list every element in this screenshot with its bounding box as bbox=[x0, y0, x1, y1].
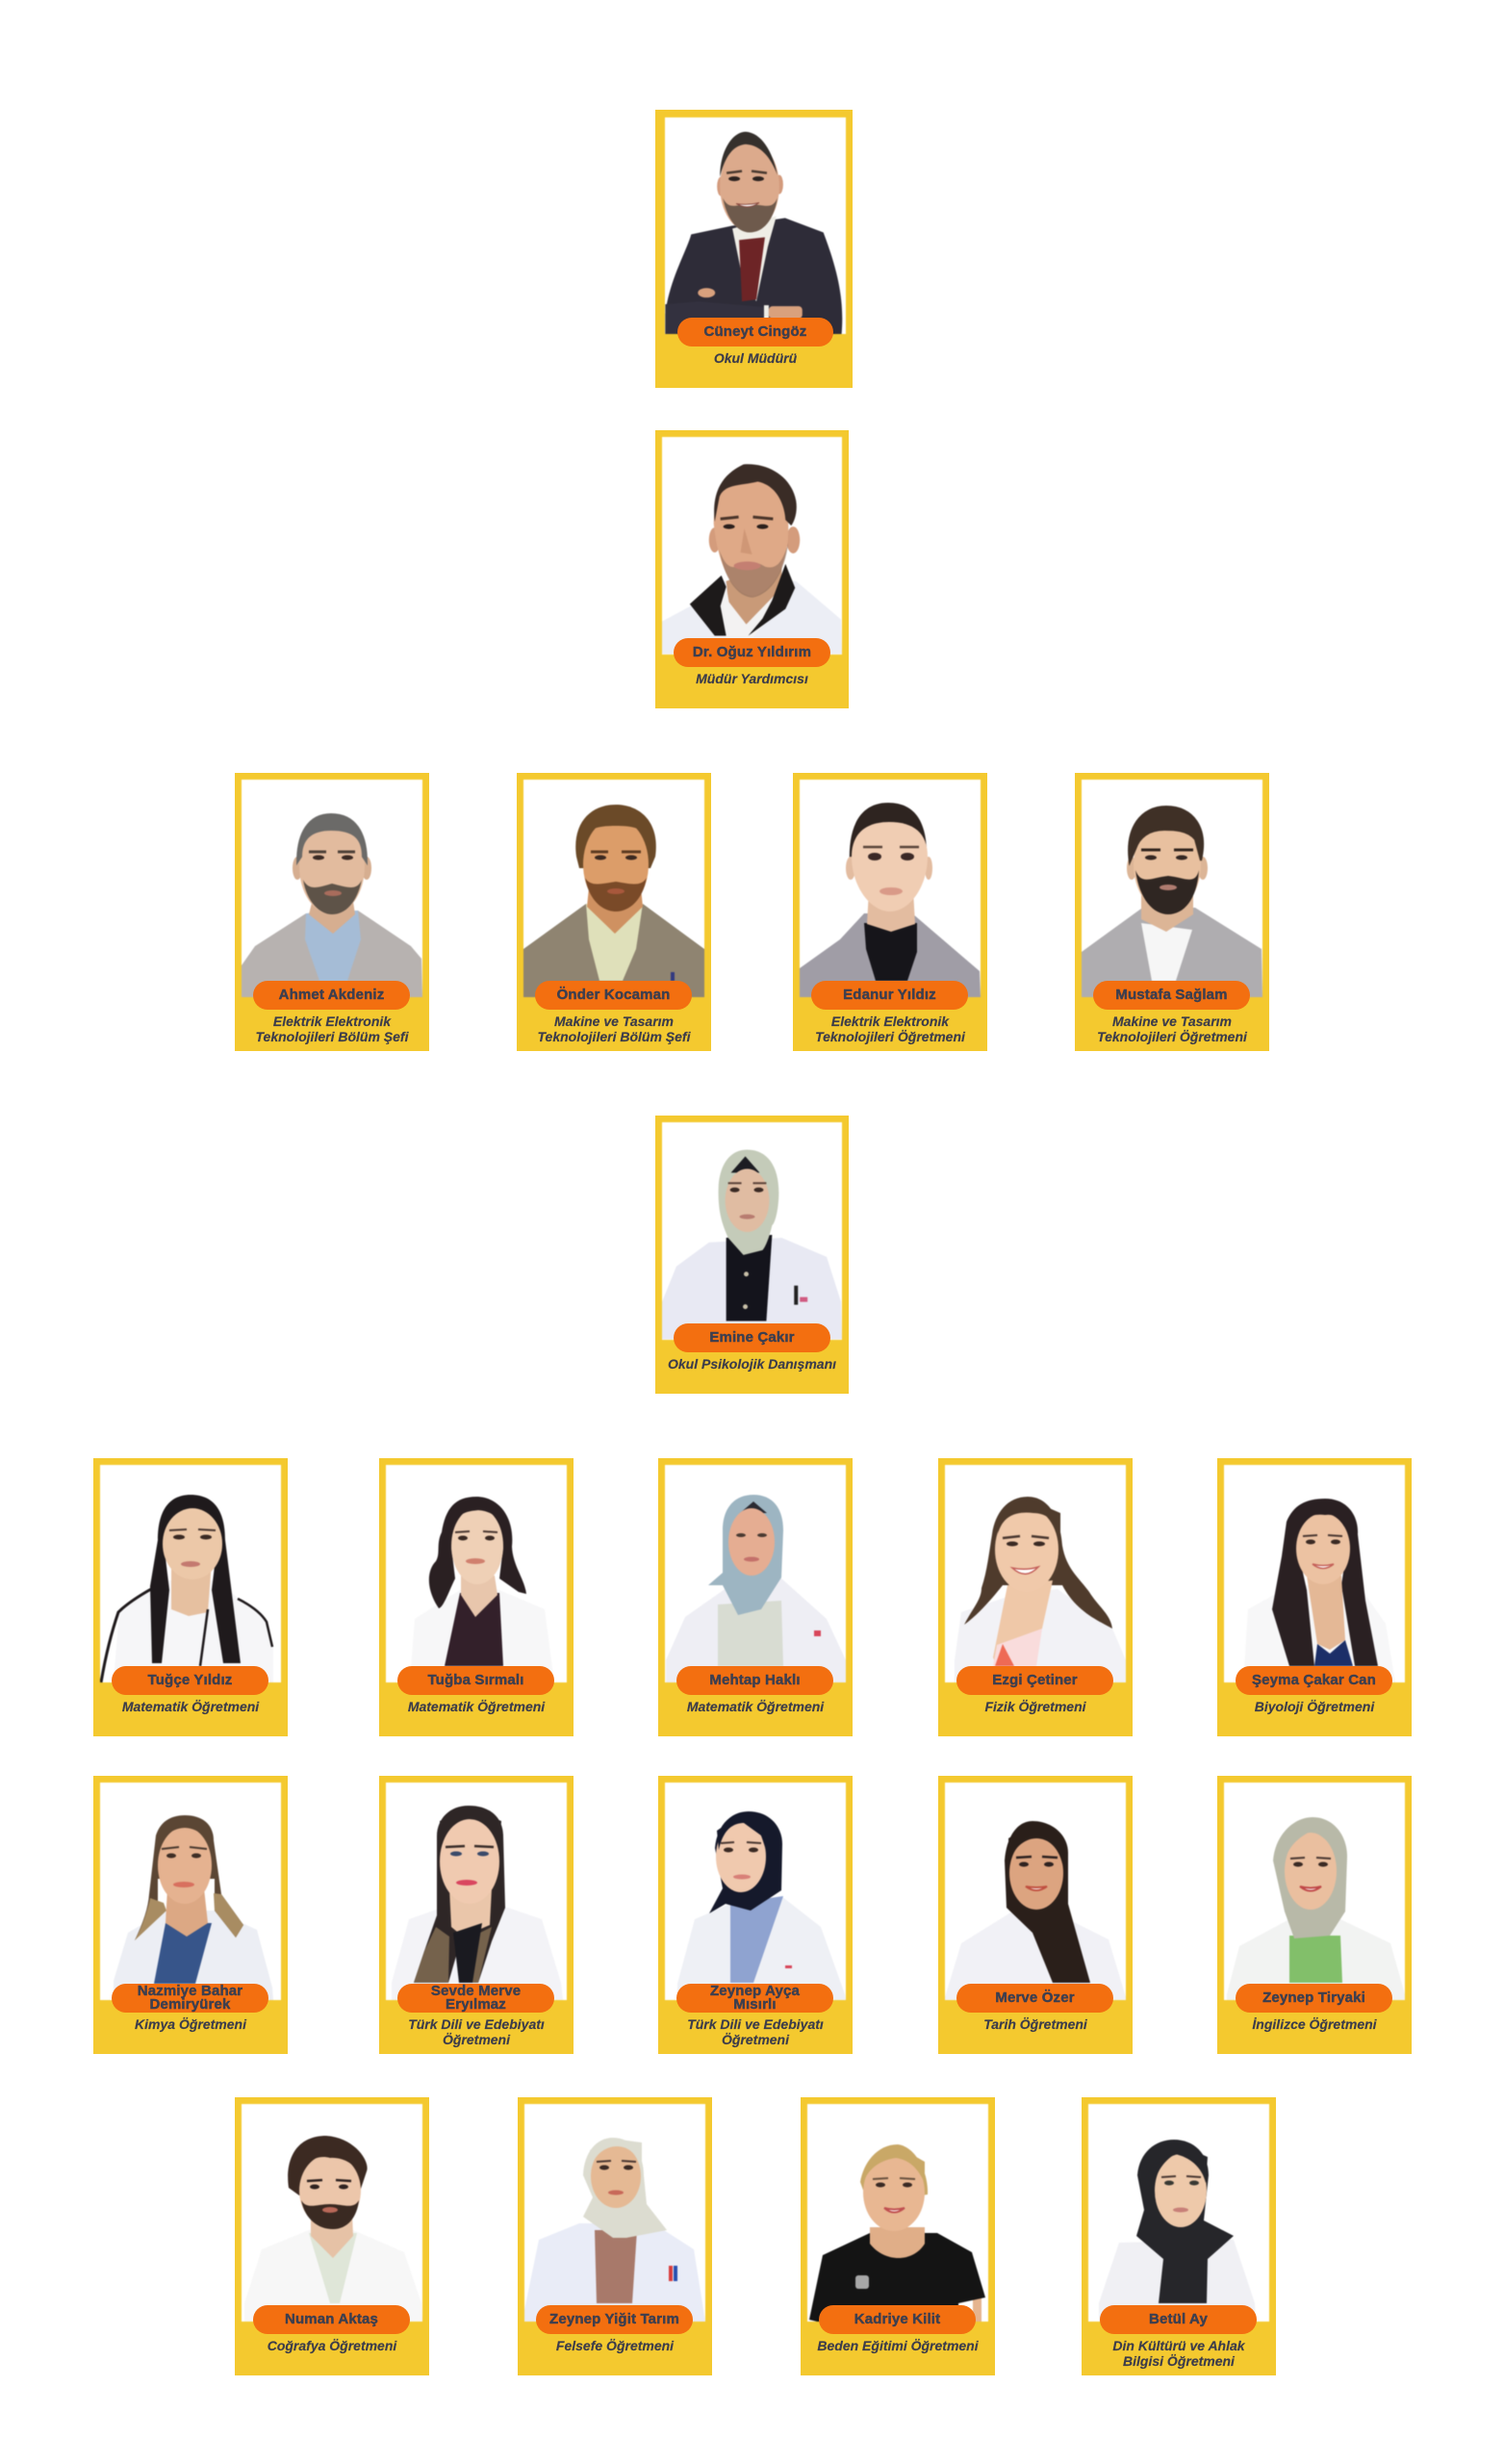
name: Zeynep Ayça Mısırlı: Mısırlı bbox=[733, 1996, 777, 2013]
role: Fizik Öğretmeni: Fizik Öğretmeni bbox=[984, 1699, 1086, 1714]
role: Beden Eğitimi Öğretmeni: Beden Eğitimi Öğretmeni bbox=[817, 2338, 979, 2353]
name: Mustafa Sağlam: Mustafa Sağlam bbox=[1115, 987, 1228, 1003]
role: Okul Psikolojik Danışmanı: Okul Psikolojik Danışmanı bbox=[668, 1356, 836, 1372]
card: Tuğba Sırmalı bbox=[379, 1458, 574, 1736]
role: Felsefe Öğretmeni: Felsefe Öğretmeni bbox=[556, 2338, 674, 2353]
name: Zeynep Tiryaki bbox=[1236, 1984, 1392, 2013]
portrait: Zeynep Tiryaki bbox=[1224, 1783, 1405, 2000]
name: Edanur Yıldız bbox=[811, 981, 968, 1010]
role: Elektrik Elektronik Teknolojileri Bölüm Şefi: Teknolojileri Bölüm Şefi bbox=[256, 1029, 408, 1044]
portrait: Edanur Yıldız bbox=[800, 780, 981, 997]
name: Emine Çakır: Emine Çakır bbox=[709, 1329, 795, 1346]
portrait: Tuğçe Yıldız bbox=[100, 1465, 281, 1682]
portrait: Zeynep Ayça Mısırlı bbox=[665, 1783, 846, 2000]
role: Kimya Öğretmeni: Kimya Öğretmeni bbox=[135, 2016, 246, 2032]
name: Önder Kocaman bbox=[535, 981, 692, 1010]
portrait: Mehtap Haklı bbox=[665, 1465, 846, 1682]
name: Zeynep Yiğit Tarım: Zeynep Yiğit Tarım bbox=[549, 2311, 679, 2327]
role: Matematik Öğretmeni: Matematik Öğretmeni bbox=[408, 1699, 545, 1714]
card: Kadriye Kilit bbox=[801, 2097, 995, 2375]
name: Ezgi Çetiner bbox=[956, 1666, 1113, 1695]
role: Türk Dili ve Edebiyatı Öğretmeni bbox=[687, 2016, 824, 2048]
name: Betül Ay bbox=[1100, 2305, 1257, 2334]
role: Din Kültürü ve Ahlak Bilgisi Öğretmeni: Din Kültürü ve Ahlak bbox=[1112, 2338, 1245, 2353]
portrait: Mustafa Sağlam bbox=[1082, 780, 1262, 997]
name: Tuğba Sırmalı bbox=[397, 1666, 554, 1695]
portrait: Önder Kocaman bbox=[523, 780, 704, 997]
name: Dr. Oğuz Yıldırım bbox=[674, 638, 830, 667]
name: Zeynep Ayça Mısırlı bbox=[676, 1984, 833, 2013]
name: Şeyma Çakar Can: Şeyma Çakar Can bbox=[1252, 1672, 1376, 1688]
name: Kadriye Kilit bbox=[819, 2305, 976, 2334]
card: Sevde Merve Eryılmaz bbox=[379, 1776, 574, 2054]
portrait: Ahmet Akdeniz bbox=[242, 780, 422, 997]
portrait: Sevde Merve Eryılmaz bbox=[386, 1783, 567, 2000]
role: Türk Dili ve Edebiyatı Öğretmeni: Öğretmeni bbox=[722, 2032, 789, 2047]
card: Ezgi Çetiner bbox=[938, 1458, 1133, 1736]
card: Zeynep Ayça Mısırlı bbox=[658, 1776, 853, 2054]
portrait: Şeyma Çakar Can bbox=[1224, 1465, 1405, 1682]
name: Betül Ay: Betül Ay bbox=[1149, 2311, 1208, 2327]
card: Mustafa Sağlam bbox=[1075, 773, 1269, 1051]
role: Makine ve Tasarım Teknolojileri Öğretmeni: Teknolojileri Öğretmeni bbox=[1097, 1029, 1247, 1044]
name: Nazmiye Bahar Demiryürek: Demiryürek bbox=[149, 1996, 231, 2013]
name: Nazmiye Bahar Demiryürek bbox=[112, 1984, 268, 2013]
name: Zeynep Ayça Mısırlı: Zeynep Ayça bbox=[710, 1983, 800, 1999]
role: Din Kültürü ve Ahlak Bilgisi Öğretmeni: Bilgisi Öğretmeni bbox=[1123, 2353, 1235, 2369]
name: Dr. Oğuz Yıldırım: Dr. Oğuz Yıldırım bbox=[693, 644, 811, 660]
name: Ahmet Akdeniz: Ahmet Akdeniz bbox=[279, 987, 384, 1003]
name: Cüneyt Cingöz: Cüneyt Cingöz bbox=[704, 323, 806, 340]
portrait: Merve Özer bbox=[945, 1783, 1126, 2000]
card: Edanur Yıldız bbox=[793, 773, 987, 1051]
name: Cüneyt Cingöz bbox=[677, 318, 833, 346]
name: Zeynep Tiryaki: Zeynep Tiryaki bbox=[1262, 1989, 1365, 2006]
role: Elektrik Elektronik Teknolojileri Öğretmeni bbox=[815, 1014, 966, 1045]
role: Türk Dili ve Edebiyatı Öğretmeni: Türk Dili ve Edebiyatı bbox=[687, 2016, 824, 2032]
card: Mehtap Haklı bbox=[658, 1458, 853, 1736]
name: Sevde Merve Eryılmaz: Eryılmaz bbox=[446, 1996, 506, 2013]
name: Mustafa Sağlam bbox=[1093, 981, 1250, 1010]
role: Din Kültürü ve Ahlak Bilgisi Öğretmeni bbox=[1112, 2338, 1245, 2370]
role: Makine ve Tasarım Teknolojileri Bölüm Şefi: Teknolojileri Bölüm Şefi bbox=[538, 1029, 690, 1044]
role: Okul Müdürü: Okul Müdürü bbox=[714, 350, 797, 366]
name: Önder Kocaman: Önder Kocaman bbox=[557, 987, 670, 1003]
role: İngilizce Öğretmeni: İngilizce Öğretmeni bbox=[1252, 2016, 1377, 2032]
card: Nazmiye Bahar Demiryürek bbox=[93, 1776, 288, 2054]
portrait: Dr. Oğuz Yıldırım bbox=[662, 437, 842, 654]
portrait: Cüneyt Cingöz bbox=[665, 117, 846, 334]
role: Makine ve Tasarım Teknolojileri Öğretmeni: Makine ve Tasarım bbox=[1112, 1014, 1232, 1029]
role: Makine ve Tasarım Teknolojileri Bölüm Şefi: Makine ve Tasarım bbox=[554, 1014, 674, 1029]
name: Şeyma Çakar Can bbox=[1236, 1666, 1392, 1695]
name: Nazmiye Bahar Demiryürek: Nazmiye Bahar bbox=[138, 1983, 242, 1999]
portrait: Nazmiye Bahar Demiryürek bbox=[100, 1783, 281, 2000]
name: Mehtap Haklı bbox=[676, 1666, 833, 1695]
name: Numan Aktaş: Numan Aktaş bbox=[285, 2311, 378, 2327]
name: Ezgi Çetiner: Ezgi Çetiner bbox=[992, 1672, 1078, 1688]
name: Mehtap Haklı: Mehtap Haklı bbox=[709, 1672, 801, 1688]
role: Biyoloji Öğretmeni: Biyoloji Öğretmeni bbox=[1255, 1699, 1374, 1714]
name: Edanur Yıldız: Edanur Yıldız bbox=[843, 987, 936, 1003]
name: Merve Özer bbox=[956, 1984, 1113, 2013]
card: Tuğçe Yıldız bbox=[93, 1458, 288, 1736]
role: Elektrik Elektronik Teknolojileri Öğretmeni: Teknolojileri Öğretmeni bbox=[815, 1029, 965, 1044]
name: Tuğba Sırmalı: Tuğba Sırmalı bbox=[427, 1672, 524, 1688]
role: Elektrik Elektronik Teknolojileri Bölüm Şefi bbox=[256, 1014, 409, 1045]
name: Emine Çakır bbox=[674, 1323, 830, 1352]
portrait: Tuğba Sırmalı bbox=[386, 1465, 567, 1682]
card: Zeynep Tiryaki bbox=[1217, 1776, 1412, 2054]
portrait: Zeynep Yiğit Tarım bbox=[524, 2104, 705, 2322]
role: Elektrik Elektronik Teknolojileri Öğretmeni: Elektrik Elektronik bbox=[831, 1014, 949, 1029]
card: Emine Çakır bbox=[655, 1116, 849, 1394]
name: Zeynep Yiğit Tarım bbox=[536, 2305, 693, 2334]
role: Elektrik Elektronik Teknolojileri Bölüm Şefi: Elektrik Elektronik bbox=[273, 1014, 391, 1029]
name: Kadriye Kilit: Kadriye Kilit bbox=[854, 2311, 940, 2327]
role: Matematik Öğretmeni: Matematik Öğretmeni bbox=[122, 1699, 259, 1714]
card: Ahmet Akdeniz bbox=[235, 773, 429, 1051]
name: Tuğçe Yıldız: Tuğçe Yıldız bbox=[148, 1672, 232, 1688]
role: Müdür Yardımcısı: Müdür Yardımcısı bbox=[696, 671, 808, 686]
role: Makine ve Tasarım Teknolojileri Öğretmeni bbox=[1097, 1014, 1247, 1045]
portrait: Betül Ay bbox=[1088, 2104, 1269, 2322]
card: Cüneyt Cingöz bbox=[655, 110, 853, 388]
card: Betül Ay bbox=[1082, 2097, 1276, 2375]
name: Tuğçe Yıldız bbox=[112, 1666, 268, 1695]
name: Merve Özer: Merve Özer bbox=[995, 1989, 1075, 2006]
name: Sevde Merve Eryılmaz bbox=[397, 1984, 554, 2013]
role: Türk Dili ve Edebiyatı Öğretmeni: Öğretmeni bbox=[443, 2032, 510, 2047]
name: Numan Aktaş bbox=[253, 2305, 410, 2334]
role: Türk Dili ve Edebiyatı Öğretmeni: Türk Dili ve Edebiyatı bbox=[408, 2016, 545, 2032]
card: Zeynep Yiğit Tarım bbox=[518, 2097, 712, 2375]
role: Türk Dili ve Edebiyatı Öğretmeni bbox=[408, 2016, 545, 2048]
card: Merve Özer bbox=[938, 1776, 1133, 2054]
role: Tarih Öğretmeni: Tarih Öğretmeni bbox=[983, 2016, 1087, 2032]
card: Numan Aktaş bbox=[235, 2097, 429, 2375]
name: Ahmet Akdeniz bbox=[253, 981, 410, 1010]
role: Matematik Öğretmeni: Matematik Öğretmeni bbox=[687, 1699, 824, 1714]
role: Coğrafya Öğretmeni: Coğrafya Öğretmeni bbox=[268, 2338, 396, 2353]
card: Önder Kocaman bbox=[517, 773, 711, 1051]
card: Şeyma Çakar Can bbox=[1217, 1458, 1412, 1736]
card: Dr. Oğuz Yıldırım bbox=[655, 430, 849, 708]
portrait: Emine Çakır bbox=[662, 1122, 842, 1340]
portrait: Kadriye Kilit bbox=[807, 2104, 988, 2322]
name: Sevde Merve Eryılmaz: Sevde Merve bbox=[431, 1983, 521, 1999]
role: Makine ve Tasarım Teknolojileri Bölüm Şefi bbox=[538, 1014, 691, 1045]
portrait: Ezgi Çetiner bbox=[945, 1465, 1126, 1682]
portrait: Numan Aktaş bbox=[242, 2104, 422, 2322]
